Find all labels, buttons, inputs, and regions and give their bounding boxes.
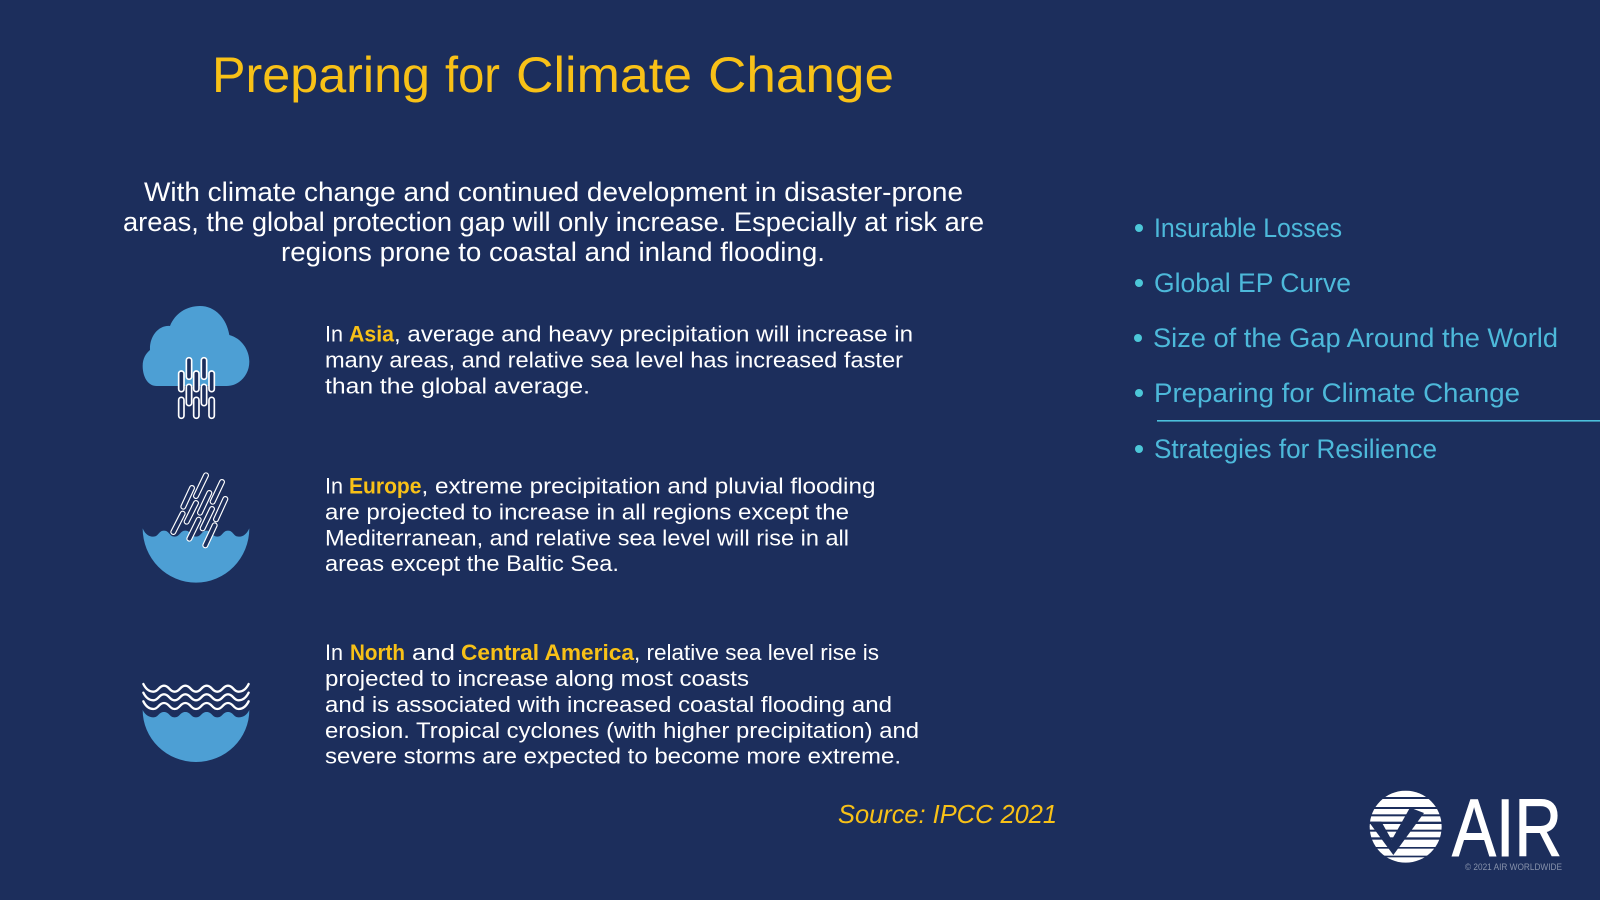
- icon: rain cloud: [143, 306, 249, 418]
- text: North and Central America: Central America: [461, 640, 634, 665]
- agenda list: Global EP Curve: [1154, 268, 1351, 298]
- title: Preparing: [212, 47, 430, 103]
- agenda list: Strategies for Resilience: [1154, 434, 1437, 464]
- text: Asia: than the global average.: [325, 374, 590, 398]
- text: Asia: In: [325, 322, 343, 346]
- text: North and Central America: In: [325, 640, 343, 665]
- title: [212, 47, 894, 103]
- agenda list: Insurable Losses: [1154, 213, 1342, 243]
- icon: waves over water: [143, 684, 249, 762]
- source: Source: IPCC 2021: [838, 799, 1057, 829]
- text: North and Central America: projected to increase along most coasts: [325, 666, 749, 691]
- intro text block: With climate change and continued development in disaster-prone: [144, 177, 963, 207]
- text: Asia: many areas, and relative sea level has increased faster: [325, 348, 904, 372]
- logo: AIR: AIR: [1452, 783, 1562, 874]
- intro text block: areas, the global protection gap will only increase. Especially at risk are: [123, 207, 984, 237]
- title: Climate: [516, 47, 692, 103]
- agenda list: Preparing for Climate Change: [1154, 378, 1520, 408]
- text: North and Central America: and is associated with increased coastal flooding and: [325, 692, 892, 717]
- text: Europe: Mediterranean, and relative sea level will rise in all: [325, 525, 849, 550]
- intro text block: regions prone to coastal and inland flooding.: [281, 237, 825, 267]
- text: North and Central America: North: [350, 640, 405, 665]
- text: Europe: are projected to increase in all regions except the: [325, 499, 849, 524]
- title: Change: [708, 47, 894, 103]
- agenda list: Size of the Gap Around the World: [1153, 323, 1558, 353]
- logo: AIR: © 2021 AIR WORLDWIDE: [1465, 862, 1562, 873]
- agenda list: [1134, 213, 1600, 464]
- title: for: [445, 47, 500, 103]
- text: Europe: , extreme precipitation and pluvial flooding: [422, 473, 876, 498]
- text: North and Central America: , relative sea level rise is: [634, 640, 879, 665]
- text: Asia: , average and heavy precipitation will increase in: [394, 322, 913, 346]
- text: Europe: Europe: [349, 473, 422, 498]
- text: North and Central America: [325, 640, 919, 768]
- text: North and Central America: and: [412, 640, 455, 665]
- intro text block: [123, 177, 984, 267]
- text: Asia: Asia: [349, 322, 394, 346]
- text: North and Central America: erosion. Tropical cyclones (with higher precipitation) and: [325, 718, 919, 743]
- text: Europe: [325, 473, 876, 576]
- text: Europe: In: [325, 473, 343, 498]
- text: Europe: areas except the Baltic Sea.: [325, 551, 619, 576]
- text: North and Central America: severe storms are expected to become more extreme.: [325, 743, 901, 768]
- text: Asia: [325, 322, 913, 398]
- icon: rain over water: [143, 475, 249, 583]
- logo: AIR: [1370, 790, 1562, 870]
